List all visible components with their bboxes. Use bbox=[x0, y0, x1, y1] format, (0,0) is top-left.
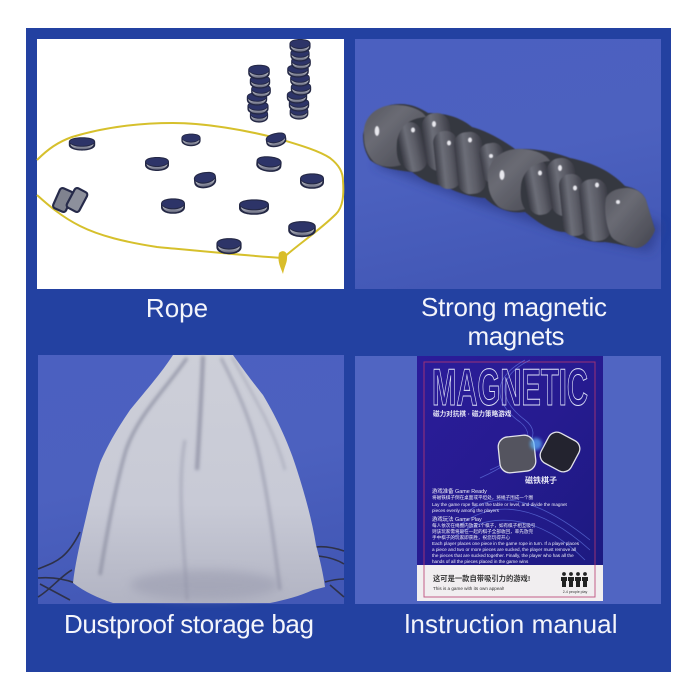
icon: players bbox=[561, 572, 588, 587]
booklet footer bbox=[417, 565, 603, 601]
pair of stuck magnets bbox=[52, 187, 88, 213]
panel: bag bbox=[38, 355, 344, 604]
drawstring bag bbox=[73, 355, 325, 603]
label: strong magnetic magnets bbox=[421, 292, 607, 351]
panel: magnets bbox=[355, 39, 662, 289]
booklet cover bbox=[417, 356, 603, 566]
bag panel background bbox=[38, 355, 344, 604]
panel: rope bbox=[37, 39, 344, 289]
rope knot bbox=[278, 251, 287, 274]
manual panel background bbox=[355, 356, 661, 604]
magnet chain bbox=[363, 104, 655, 248]
bag bottom shade bbox=[130, 570, 280, 600]
booklet rules: 将磁铁棋子倒在桌面或平坦处，将绳子围成一个圈 bbox=[432, 494, 533, 501]
bag folds bbox=[100, 356, 285, 600]
label: rope: Rope bbox=[146, 293, 208, 323]
magnet stack: left bbox=[247, 65, 271, 123]
booklet footer text: 这可是一款自带吸引力的游戏! bbox=[433, 574, 530, 583]
booklet rules: Each player places one piece in the game rope in turn. If a player places bbox=[432, 541, 580, 546]
magnet highlights bbox=[375, 121, 620, 204]
booklet rules: 游戏玩法 Game Play bbox=[432, 515, 482, 523]
label: strong magnetic magnets: magnets bbox=[468, 321, 564, 351]
players caption: 2-4 people play bbox=[563, 590, 587, 594]
booklet rules: 则该玩家需将吸在一起的棋子全部收回，率先放完 bbox=[432, 528, 533, 535]
drawstring cords bbox=[38, 532, 344, 600]
magnet stack: right bbox=[287, 39, 311, 120]
scattered magnets bbox=[69, 131, 324, 254]
magnets panel background bbox=[355, 39, 661, 289]
booklet subtitle: 磁力对抗棋 · 磁力策略游戏 bbox=[433, 409, 512, 418]
wave decoration bbox=[450, 360, 590, 560]
booklet rules: a piece and two or more pieces are sucked, the player must remove all bbox=[432, 547, 576, 552]
instruction booklet bbox=[417, 356, 603, 601]
booklet rules: 每人依次在绳圈内放置1个棋子，如有棋子相互吸引 bbox=[432, 522, 536, 529]
label: strong magnetic magnets: Strong magnetic bbox=[421, 292, 607, 322]
instruction booklet: This is a game with its own appeal! bbox=[433, 586, 504, 591]
magnet chain shadow bbox=[375, 150, 662, 252]
label: dustproof storage bag: Dustproof storage bag bbox=[64, 609, 314, 639]
booklet image caption: 磁铁棋子 bbox=[525, 475, 557, 485]
panel: manual bbox=[355, 356, 661, 604]
booklet rules bbox=[432, 487, 580, 564]
booklet rules: Lay the game rope flat on the table or level, and divide the magnet bbox=[432, 502, 568, 507]
booklet rules: pieces evenly among the players bbox=[432, 508, 500, 513]
booklet rules: 手中棋子的玩家即获胜，祝您玩得开心 bbox=[432, 534, 511, 541]
booklet rules: hands of all the pieces placed in the game wins bbox=[432, 559, 529, 564]
booklet rules: 游戏准备 Game Ready bbox=[432, 487, 487, 495]
booklet rules: the pieces that are sucked together. Finally, the player who has all the bbox=[432, 553, 574, 558]
booklet magnet image bbox=[497, 429, 583, 475]
rope panel background bbox=[37, 39, 344, 289]
booklet inner border bbox=[424, 362, 595, 597]
yellow rope loop bbox=[37, 123, 343, 258]
label: instruction manual: lnstruction manual bbox=[404, 609, 618, 639]
